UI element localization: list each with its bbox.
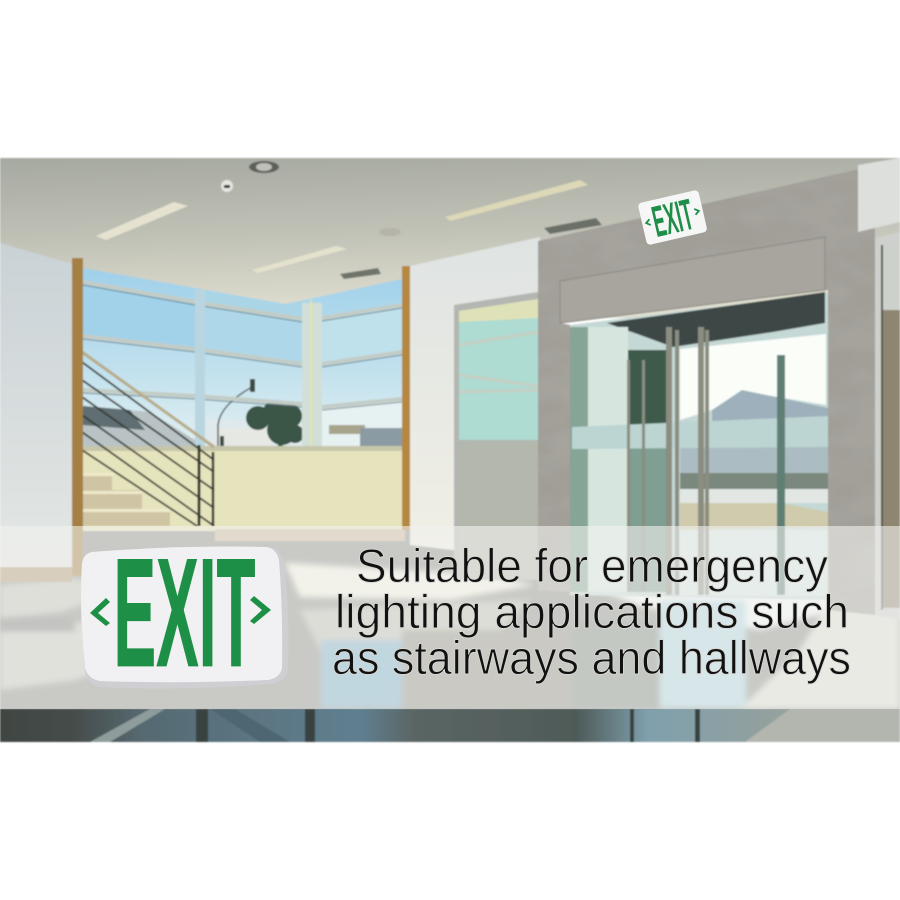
side window bbox=[454, 292, 538, 580]
glossy floor bbox=[0, 530, 900, 742]
white mid wall bbox=[410, 237, 540, 560]
skirting under yellow wall bbox=[215, 529, 405, 541]
small sign arrows bbox=[646, 208, 699, 226]
caption text: lighting applications such bbox=[335, 585, 849, 638]
left skirting bbox=[0, 567, 72, 582]
lintel bbox=[560, 237, 825, 323]
lower yellow wall bbox=[83, 447, 403, 531]
caption text: Suitable for emergency bbox=[356, 539, 828, 592]
ceiling bbox=[0, 158, 900, 318]
stair railing bbox=[82, 352, 214, 526]
caption text: as stairways and hallways bbox=[332, 631, 851, 684]
photo: building lobby interior bbox=[0, 158, 900, 742]
small exit sign above the door: EXIT bbox=[648, 190, 698, 247]
left wall bbox=[0, 243, 72, 570]
glass entrance bbox=[570, 292, 828, 600]
ceiling fixtures bbox=[96, 161, 602, 279]
large sign chevron right bbox=[250, 596, 271, 624]
stairs bbox=[82, 473, 170, 526]
concrete portal bbox=[538, 170, 875, 615]
product photo: large exit sign: EXIT bbox=[114, 526, 256, 699]
product photo: large exit sign bbox=[81, 526, 288, 699]
window wall with glazing bbox=[83, 268, 402, 450]
large sign chevron left bbox=[90, 598, 110, 626]
right wall and side door bbox=[858, 158, 900, 620]
caption text bbox=[332, 539, 851, 684]
tree outside window bbox=[246, 400, 304, 446]
wood posts bbox=[72, 258, 83, 576]
small exit sign above the door bbox=[637, 188, 709, 249]
window mullions bbox=[83, 282, 402, 407]
translucent caption band bbox=[0, 526, 900, 709]
lower floor reflection strip bbox=[0, 709, 900, 742]
